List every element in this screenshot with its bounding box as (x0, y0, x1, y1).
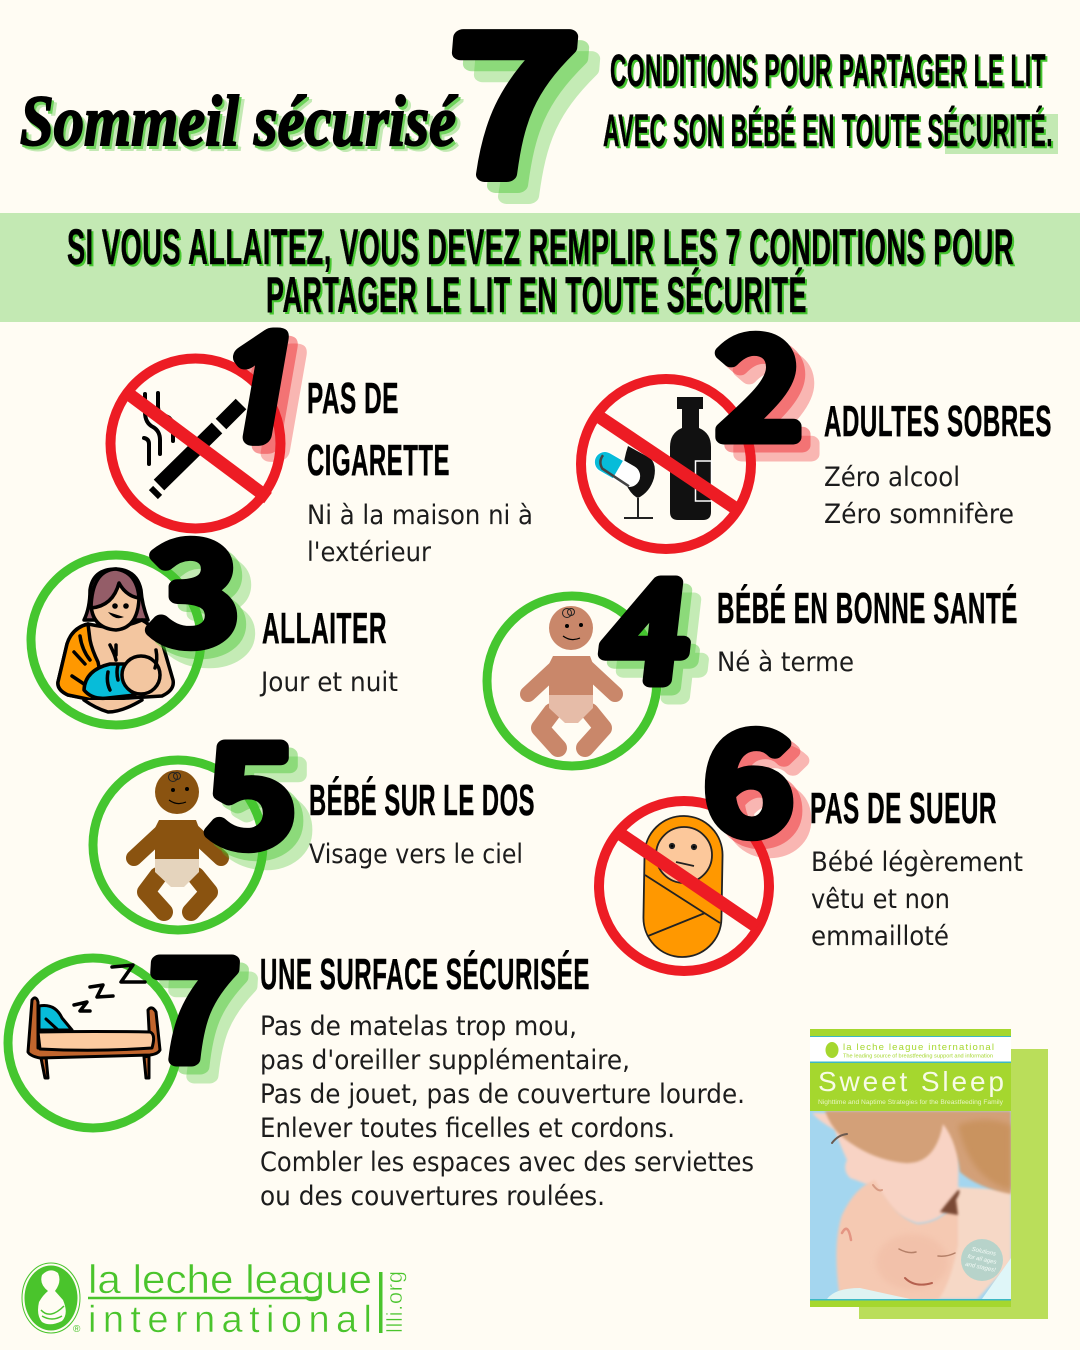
numeral 6: 6 (714, 683, 801, 880)
icon: prohibition sign (599, 801, 769, 971)
heading: CIGARETTE (307, 436, 450, 485)
description: Pas de matelas trop mou, (260, 1011, 577, 1042)
logo emblem: ® (73, 1324, 81, 1335)
numeral 6: 6 (705, 675, 792, 872)
numeral 1: 1 (213, 329, 327, 465)
description: Bébé légèrement (811, 847, 1023, 878)
numeral 2: 2 (726, 288, 810, 485)
face details (108, 603, 129, 618)
numeral 4: 4 (595, 524, 701, 720)
heading: BÉBÉ SUR LE DOS (309, 775, 535, 825)
highlight behind sécurité (945, 114, 1058, 154)
description: ou des couvertures roulées. (260, 1181, 605, 1212)
description (307, 500, 533, 568)
logo wordmark: international (88, 1299, 372, 1341)
icon: prohibition sign (110, 358, 280, 528)
numeral 7: 7 (162, 919, 260, 1116)
numeral 7: 7 (144, 902, 242, 1099)
description: Jour et nuit (259, 667, 398, 698)
description (824, 462, 1014, 530)
description: pas d'oreiller supplémentaire, (260, 1045, 630, 1076)
logo emblem (22, 1263, 81, 1335)
book cover: Sweet Sleep (810, 1029, 1048, 1319)
numeral 7: 7 (153, 910, 251, 1107)
description: Visage vers le ciel (309, 839, 523, 870)
numeral 5: 5 (217, 694, 303, 891)
icon: green ring (487, 596, 657, 766)
title: Sommeil sécurisé: Sommeil sécurisé (20, 81, 458, 161)
icon: green ring (93, 760, 263, 930)
numeral 3: 3 (158, 492, 246, 690)
photo: mother and baby: for all ages (967, 1254, 997, 1266)
heading: PAS DE (307, 374, 399, 423)
logo wordmark: la leche league (88, 1258, 372, 1302)
photo: mother and baby: Solutions (971, 1247, 996, 1258)
numeral 1: 1 (222, 337, 336, 473)
description: Combler les espaces avec des serviettes (260, 1147, 754, 1178)
numeral 3: 3 (149, 484, 237, 682)
description: l'extérieur (307, 537, 432, 568)
numeral 6: 6 (723, 692, 810, 889)
numeral 4: 4 (613, 541, 719, 737)
subtitle (603, 45, 1055, 158)
header: title block (20, 0, 1058, 252)
description (260, 1011, 754, 1212)
numeral 5: 5 (208, 686, 294, 883)
icon: cigarette and smoke (144, 393, 241, 497)
icon: bed (28, 965, 160, 1078)
icon: prohibition sign (581, 379, 751, 549)
numeral 3: 3 (167, 501, 255, 699)
heading: ALLAITER (262, 604, 387, 653)
description: Enlever toutes ficelles et cordons. (260, 1113, 675, 1144)
description: Zéro alcool (824, 462, 960, 493)
numeral 5: 5 (226, 703, 312, 900)
photo: mother and baby: and stages! (965, 1262, 996, 1274)
icon: swaddled baby (643, 815, 723, 958)
description: Né à terme (717, 647, 854, 678)
description: Pas de jouet, pas de couverture lourde. (260, 1079, 745, 1110)
logo wordmark (88, 1258, 407, 1341)
numeral 4: 4 (604, 532, 710, 728)
panel: condition 3 breastfeed (31, 484, 398, 725)
panel: condition 1 no smoking (110, 321, 533, 568)
icon: mother breastfeeding (58, 569, 173, 712)
title: Sommeil sécurisé: Sommeil sécurisé (25, 86, 463, 166)
panel: condition 7 safe surface (8, 902, 754, 1212)
description: Zéro somnifère (824, 499, 1014, 530)
heading: UNE SURFACE SÉCURISÉE (260, 949, 590, 999)
icon: baby (134, 770, 221, 912)
description (811, 847, 1023, 952)
panel: condition 6 no sweating (599, 675, 1023, 971)
panel: condition 2 sober adults (581, 280, 1052, 549)
book cover: Sweet Sleep: la leche league international (843, 1042, 994, 1053)
book cover: Sweet Sleep: Nighttime and Naptime Strategies for the Breastfeeding Family (818, 1099, 1004, 1106)
description: vêtu et non (811, 884, 950, 915)
description: emmailloté (811, 921, 949, 952)
heading (307, 374, 450, 485)
photo: mother and baby (810, 1111, 1011, 1300)
panel: condition 4 healthy baby (487, 524, 1018, 766)
logo wordmark: llli.org (382, 1271, 407, 1333)
icon: bottle, glass and pill (591, 397, 712, 520)
book cover: Sweet Sleep: Sweet Sleep (818, 1066, 1004, 1097)
description: Ni à la maison ni à (307, 500, 533, 531)
title: Sommeil sécurisé: Sommeil sécurisé (22, 84, 460, 164)
numeral 2: 2 (735, 297, 819, 494)
book cover: Sweet Sleep: The leading source of breastfeeding support and information (843, 1054, 993, 1060)
numeral 2: 2 (717, 280, 801, 477)
icon: green ring (8, 958, 178, 1128)
numeral 1: 1 (204, 321, 318, 457)
banner (0, 213, 1080, 325)
icon: green ring (31, 555, 201, 725)
icon: baby (528, 606, 615, 748)
logo: La Leche League International (22, 1258, 407, 1341)
panel: condition 5 baby on back (93, 686, 535, 930)
